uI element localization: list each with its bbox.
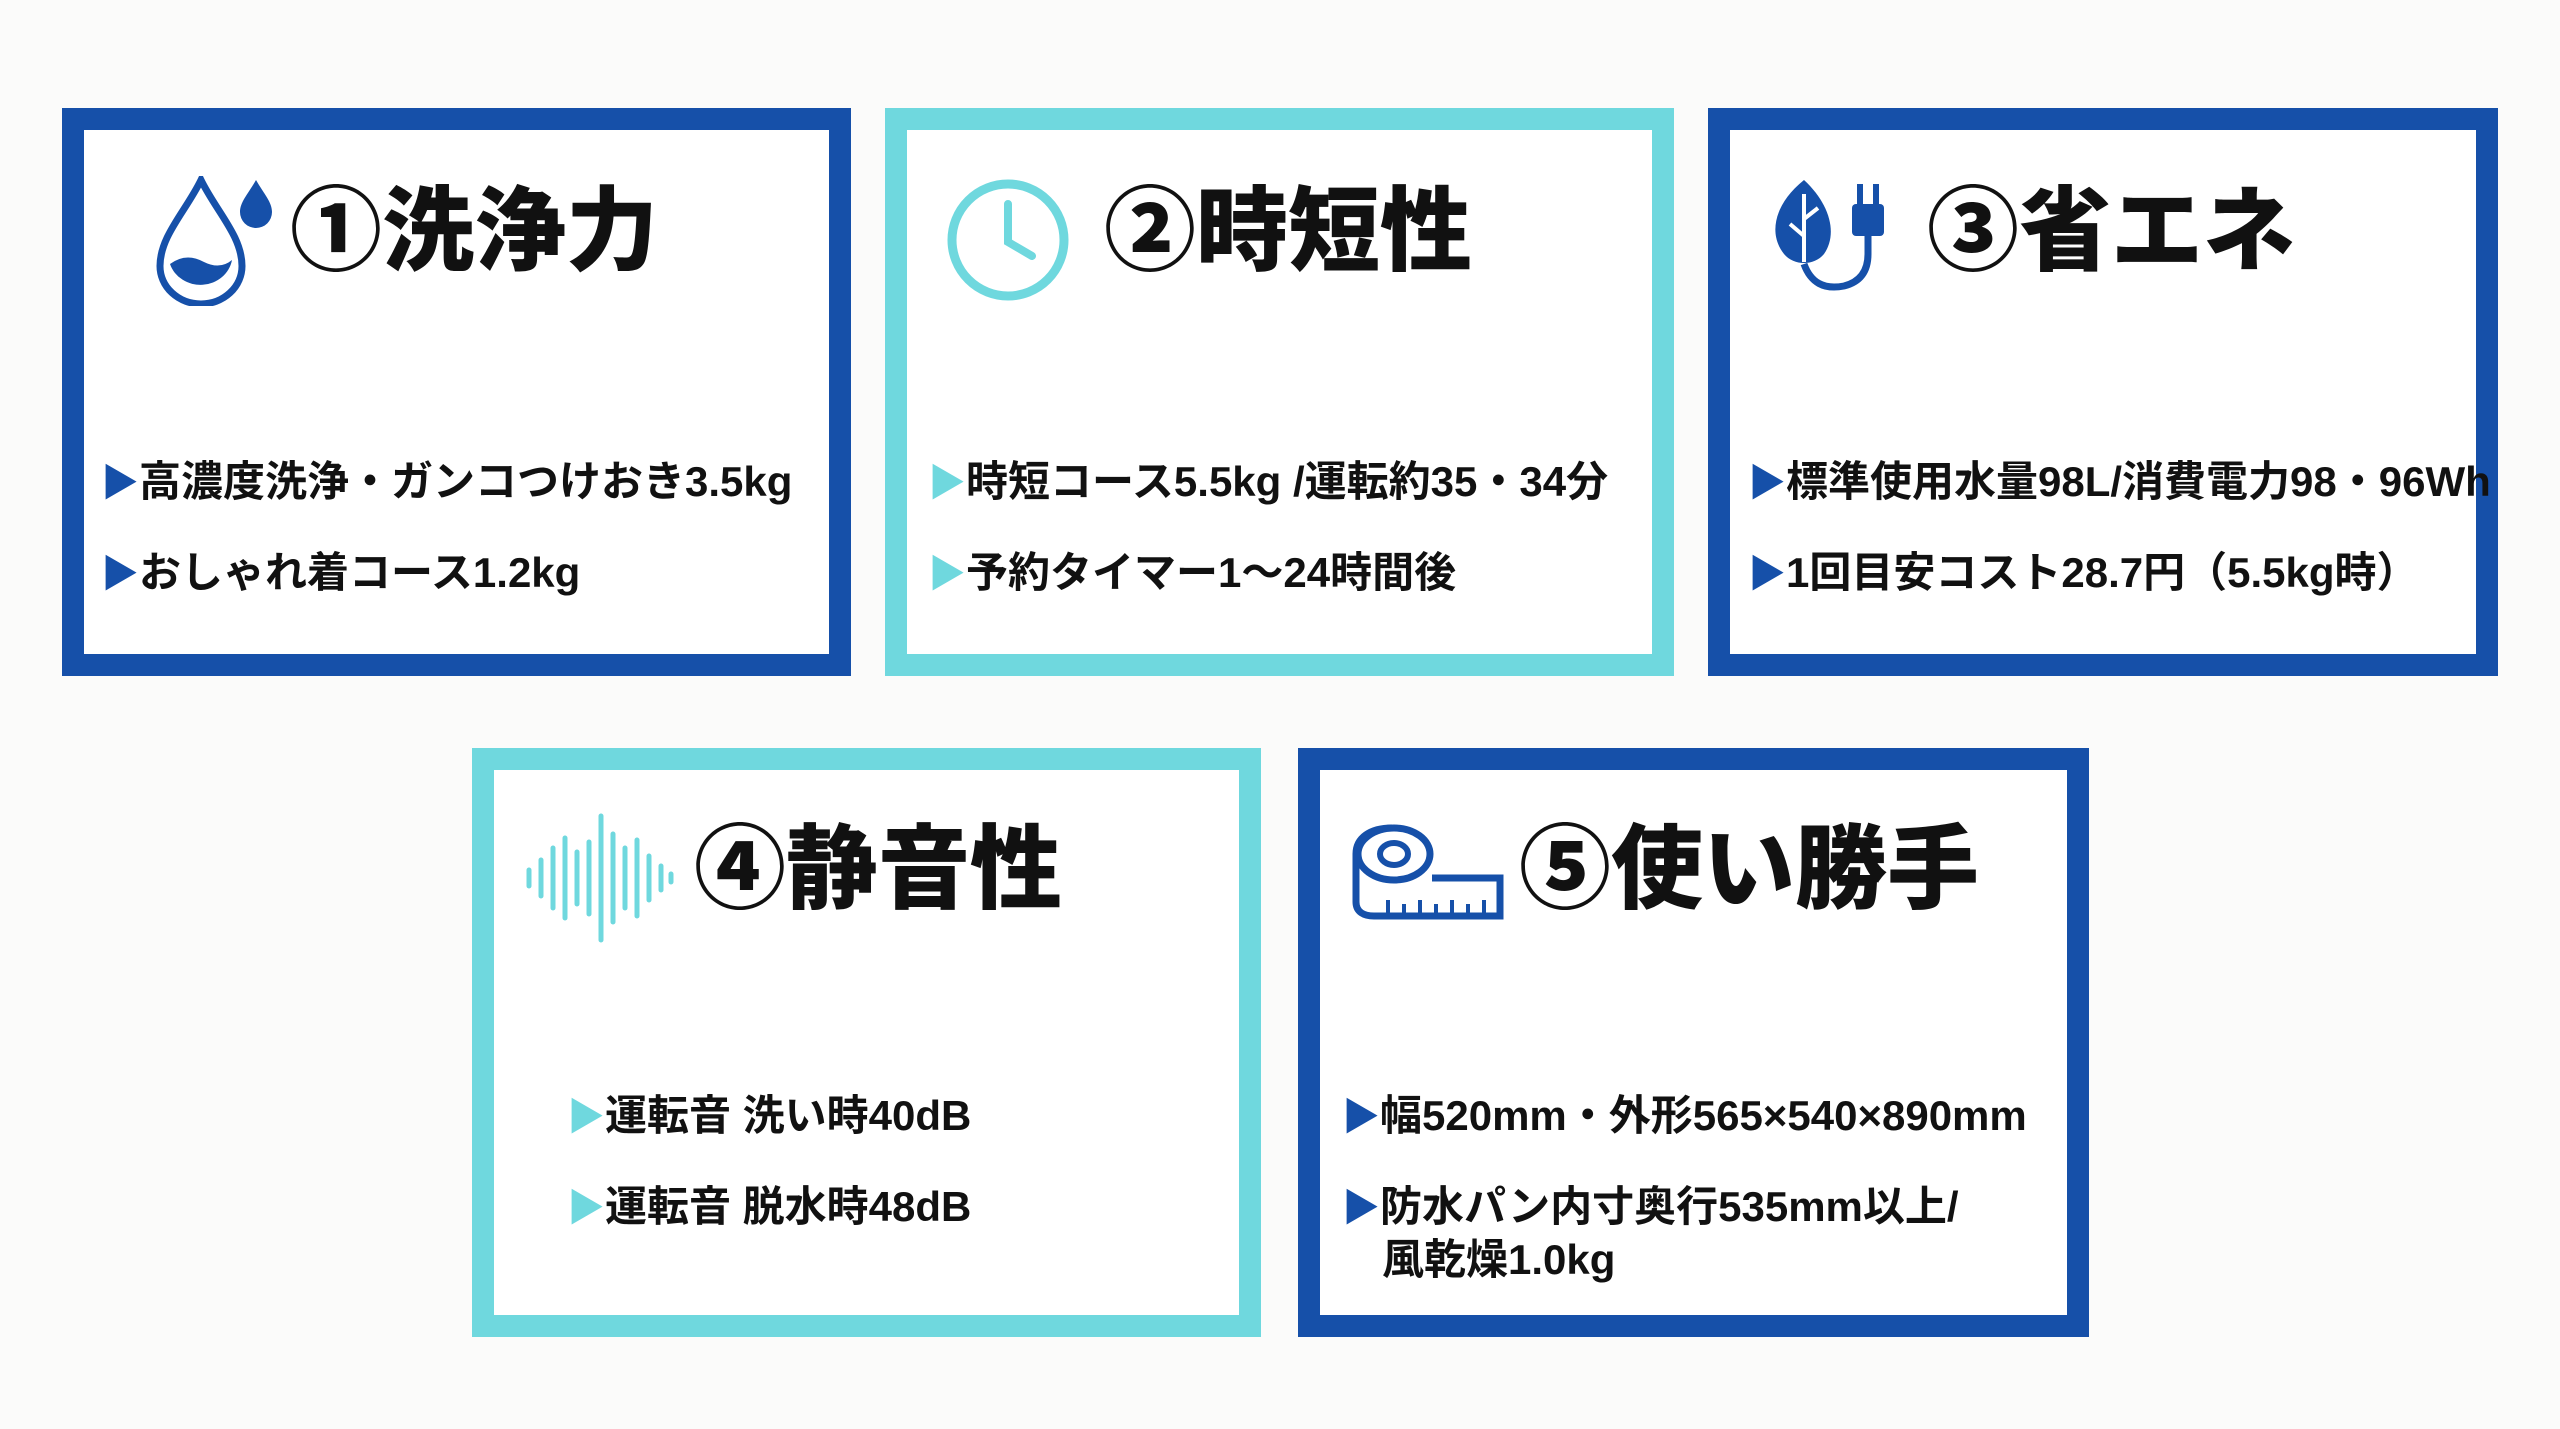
bullet list [928,458,1608,596]
panel: 時短性 [885,108,1674,676]
icon: leaf plug [1775,180,1884,290]
panel: 洗浄力 [62,108,851,676]
bullet list: ▶1回目安コスト28.7円（5.5kg時） [1748,549,2419,596]
bullet list: ▶幅520mm・外形565×540×890mm [1342,1092,2027,1139]
heading: ⑤使い勝手 [1519,819,1979,921]
bullet list: ▶おしゃれ着コース1.2kg [101,549,580,596]
bullet list [1748,458,2491,596]
icon: water drops [156,176,272,306]
icon: tape measure [1352,824,1504,920]
bullet list: ▶運転音 洗い時40dB [567,1092,971,1139]
bullet list [101,458,792,596]
icon: sound wave [526,814,674,942]
bullet list: ▶時短コース5.5kg /運転約35・34分 [928,458,1608,505]
heading: ①洗浄力 [290,181,658,283]
panel: 省エネ [1708,108,2498,676]
bullet list: ▶運転音 脱水時48dB [567,1183,971,1230]
bullet list: 風乾燥1.0kg [1382,1236,1615,1282]
heading: ③省エネ [1927,181,2295,283]
bullet list: ▶標準使用水量98L/消費電力98・96Wh [1748,458,2491,505]
heading: ④静音性 [694,819,1062,921]
panel: 使い勝手 [1298,748,2089,1337]
bullet list [567,1092,971,1230]
bullet list: ▶高濃度洗浄・ガンコつけおき3.5kg [101,458,792,505]
icon: clock [948,180,1068,300]
bullet list: ▶防水パン内寸奥行535mm以上/ [1342,1183,1959,1230]
heading: ②時短性 [1104,181,1472,283]
panel: 静音性 [472,748,1261,1337]
bullet list: ▶予約タイマー1～24時間後 [928,549,1456,596]
bullet list [1342,1092,2027,1282]
